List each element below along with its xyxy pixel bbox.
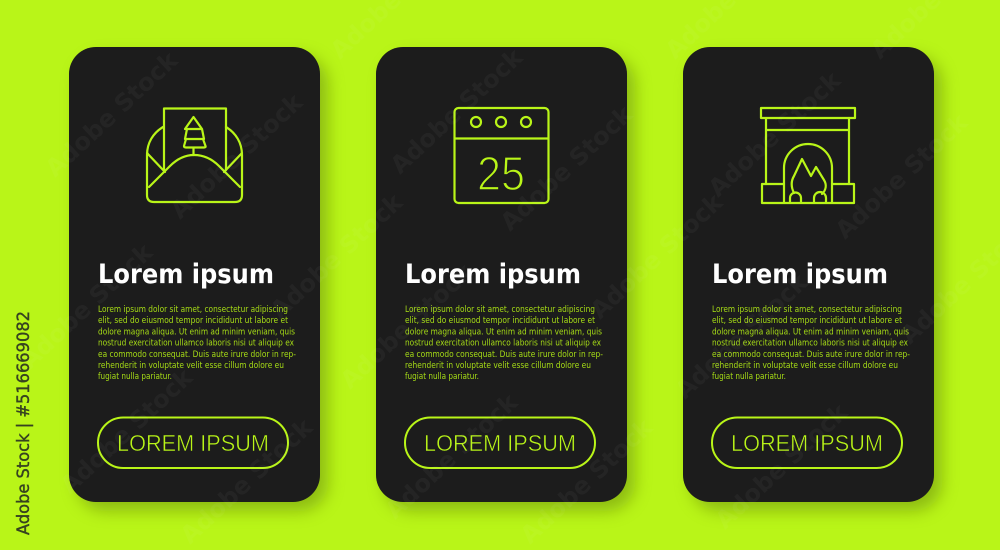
text block: rehenderit in voluptate velit esse cillum dolore eu bbox=[98, 361, 284, 371]
watermarks: Adobe Stock bbox=[495, 100, 639, 236]
text block: elit, sed do eiusmod tempor incididunt ut labore et bbox=[405, 316, 595, 326]
button bbox=[405, 418, 595, 468]
heading: Lorem ipsum bbox=[98, 259, 274, 290]
icon: fireplace bbox=[761, 108, 855, 203]
text block: fugiat nulla pariatur. bbox=[712, 372, 786, 382]
watermarks: Adobe Stock bbox=[703, 66, 847, 202]
icon: calendar 25: 25 bbox=[477, 148, 525, 201]
watermarks: Adobe Stock bbox=[385, 43, 529, 179]
icon: calendar 25 bbox=[454, 108, 548, 203]
text block bbox=[712, 305, 910, 382]
text block: Lorem ipsum dolor sit amet, consectetur adipiscing bbox=[712, 305, 902, 315]
watermarks: Adobe Stock bbox=[40, 46, 184, 182]
text block: nostrud exercitation ullamco laboris nisi ut aliquip ex bbox=[712, 339, 908, 349]
button: LOREM IPSUM bbox=[424, 430, 576, 456]
watermarks: Adobe Stock bbox=[670, 268, 814, 404]
watermarks: Adobe Stock bbox=[585, 188, 729, 324]
watermarks: Adobe Stock bbox=[515, 413, 659, 549]
panel: envelope card bbox=[69, 47, 328, 511]
watermarks: Adobe Stock bbox=[15, 238, 159, 374]
heading: Lorem ipsum bbox=[405, 259, 581, 290]
watermarks: Adobe Stock bbox=[55, 363, 199, 499]
heading: Lorem ipsum bbox=[712, 259, 888, 290]
button bbox=[712, 418, 902, 468]
text block: ea commodo consequat. Duis aute irure dolor in rep- bbox=[405, 350, 603, 360]
watermarks: Adobe Stock bbox=[335, 258, 479, 394]
text block: rehenderit in voluptate velit esse cillum dolore eu bbox=[405, 361, 591, 371]
text block: rehenderit in voluptate velit esse cillum dolore eu bbox=[712, 361, 898, 371]
button: LOREM IPSUM bbox=[731, 430, 883, 456]
watermarks: Adobe Stock bbox=[380, 388, 524, 524]
text block: nostrud exercitation ullamco laboris nisi ut aliquip ex bbox=[98, 339, 294, 349]
panel: calendar card bbox=[376, 47, 635, 511]
icon: envelope with tree card bbox=[147, 108, 242, 202]
text block: dolore magna aliqua. Ut enim ad minim veniam, quis bbox=[712, 327, 909, 337]
text block: nostrud exercitation ullamco laboris nisi ut aliquip ex bbox=[405, 339, 601, 349]
text block: fugiat nulla pariatur. bbox=[98, 372, 172, 382]
stock id label: Adobe Stock | #516669082 bbox=[14, 311, 34, 535]
watermarks: Adobe Stock bbox=[175, 413, 319, 549]
watermarks: Adobe Stock bbox=[265, 188, 409, 324]
text block bbox=[405, 305, 603, 382]
text block: dolore magna aliqua. Ut enim ad minim veniam, quis bbox=[98, 327, 295, 337]
panel: fireplace card bbox=[683, 47, 942, 511]
text block bbox=[98, 305, 296, 382]
watermarks: Adobe Stock bbox=[165, 88, 309, 224]
text block: elit, sed do eiusmod tempor incididunt ut labore et bbox=[98, 316, 288, 326]
text block: Lorem ipsum dolor sit amet, consectetur adipiscing bbox=[98, 305, 288, 315]
text block: ea commodo consequat. Duis aute irure dolor in rep- bbox=[98, 350, 296, 360]
button bbox=[98, 418, 288, 468]
text block: elit, sed do eiusmod tempor incididunt ut labore et bbox=[712, 316, 902, 326]
text block: fugiat nulla pariatur. bbox=[405, 372, 479, 382]
watermarks: Adobe Stock bbox=[830, 108, 974, 244]
watermarks: Adobe Stock bbox=[710, 398, 854, 534]
text block: dolore magna aliqua. Ut enim ad minim veniam, quis bbox=[405, 327, 602, 337]
button: LOREM IPSUM bbox=[117, 430, 269, 456]
text block: Lorem ipsum dolor sit amet, consectetur adipiscing bbox=[405, 305, 595, 315]
text block: ea commodo consequat. Duis aute irure dolor in rep- bbox=[712, 350, 910, 360]
